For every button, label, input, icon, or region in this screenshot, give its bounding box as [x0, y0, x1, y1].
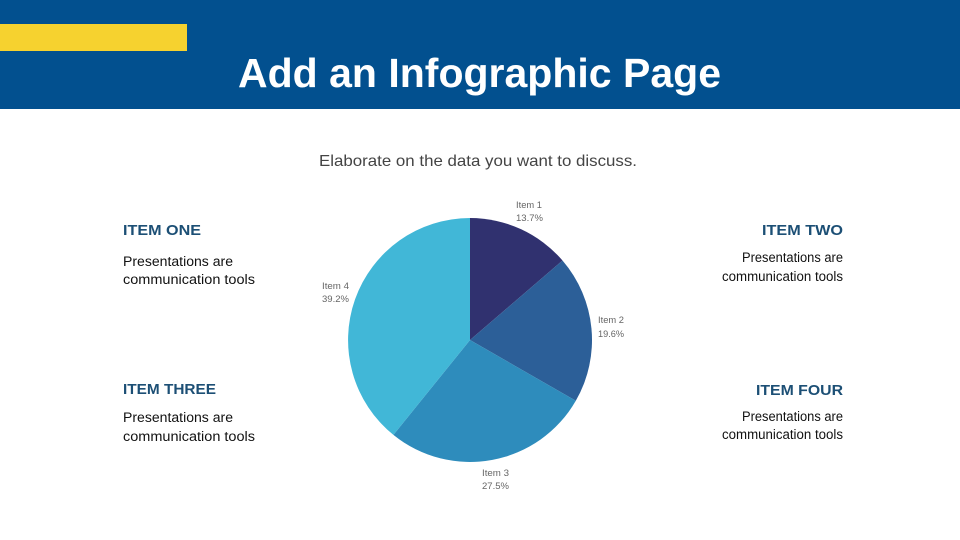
label: item 2: Item 2: [598, 315, 624, 326]
slice: item 4: [348, 218, 470, 435]
text: item one description: Presentations are: [123, 254, 233, 269]
heading: item two: ITEM TWO: [762, 222, 843, 239]
label: item 1: 13.7%: [516, 213, 544, 224]
slice: item 1: [470, 218, 562, 340]
text: item four description: Presentations are: [742, 409, 843, 424]
text: item two description: Presentations are: [742, 250, 843, 265]
label: item 2: 19.6%: [598, 329, 625, 340]
label: item 4: Item 4: [322, 281, 349, 292]
header band: [0, 0, 960, 109]
yellow accent bar: [0, 24, 187, 51]
slice: item 3: [393, 340, 576, 462]
text: item two description: communication tools: [722, 269, 843, 284]
title: Add an Infographic Page: [238, 50, 721, 96]
text: item four description: communication tools: [722, 427, 843, 442]
panel: item four: [722, 382, 843, 442]
panel: item two: [722, 222, 843, 284]
label: item 4: 39.2%: [322, 294, 350, 305]
panel: item one: [123, 222, 255, 287]
label: item 3: Item 3: [482, 468, 509, 479]
text: item one description: communication tools: [123, 272, 255, 287]
text: item three description: Presentations are: [123, 410, 233, 425]
heading: item one: ITEM ONE: [123, 222, 201, 239]
heading: item three: ITEM THREE: [123, 381, 216, 398]
text: item three description: communication tools: [123, 429, 255, 444]
slice: item 2: [470, 260, 592, 401]
label: item 1: Item 1: [516, 200, 542, 211]
heading: item four: ITEM FOUR: [756, 382, 843, 399]
pie chart: [348, 218, 592, 462]
panel: item three: [123, 381, 255, 444]
subtitle: Elaborate on the data you want to discuss.: [319, 153, 637, 170]
label: item 3: 27.5%: [482, 481, 510, 492]
